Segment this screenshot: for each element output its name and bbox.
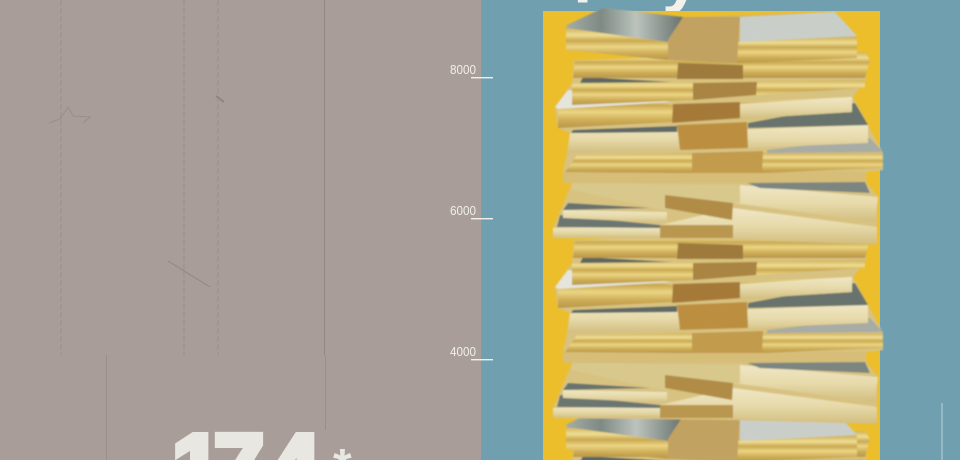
yellow chart column	[543, 11, 880, 460]
left panel background	[0, 0, 481, 460]
faint vertical line on right panel	[941, 403, 943, 460]
right panel background	[481, 0, 960, 460]
heading fragment cropped at top edge	[578, 0, 686, 11]
axis label 8000: 8000	[450, 62, 476, 77]
big number 174 with asterisk	[175, 432, 352, 460]
axis label 8000	[450, 62, 493, 78]
axis label 6000	[450, 203, 493, 219]
faint scratches on left panel	[49, 0, 326, 460]
axis label 4000: 4000	[450, 344, 476, 359]
y-axis scale	[450, 62, 493, 360]
axis label 4000	[450, 344, 493, 360]
axis label 6000: 6000	[450, 203, 476, 218]
stack of dollar bundles	[553, 8, 883, 460]
